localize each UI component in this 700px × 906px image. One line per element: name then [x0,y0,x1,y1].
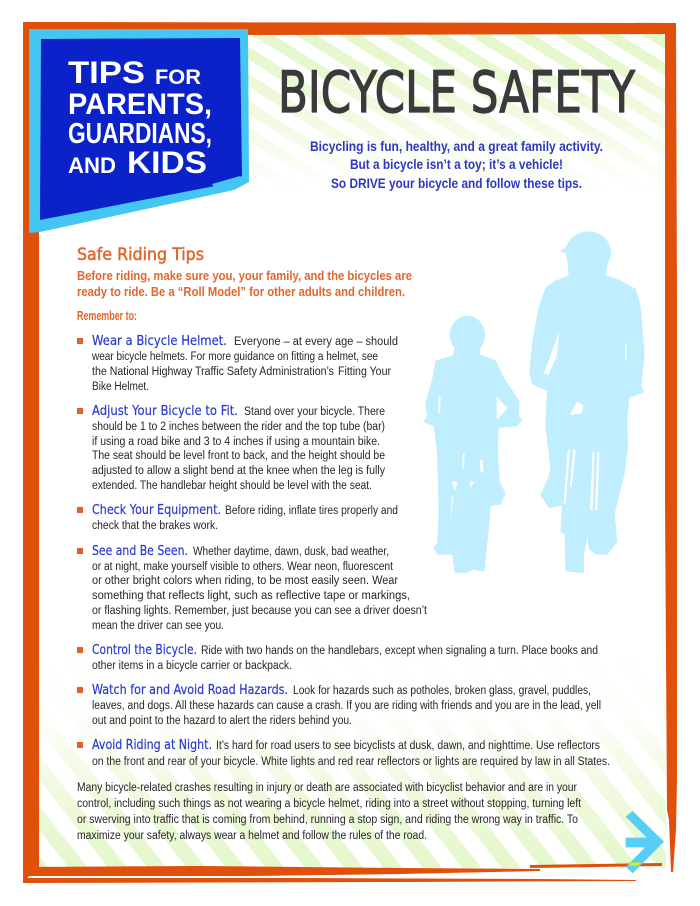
tip: wear a bicycle helmet [77,333,398,393]
tip: wear a bicycle helmet: Wear a Bicycle Helmet. [92,333,227,349]
tip: watch for road hazards: Look for hazards such as potholes, broken glass, gravel, puddles, [293,685,591,697]
tip: watch for road hazards: leaves, and dogs. All these hazards can cause a crash. If you are riding with friends and you are in the lead, yell [92,700,601,712]
intro text: Bicycling is fun, healthy, and a great family activity. [310,138,603,154]
lead-in text [77,269,412,323]
tip: see and be seen: Whether daytime, dawn, dusk, bad weather, [193,546,389,558]
tip: avoid riding at night: on the front and rear of your bicycle. White lights and red rear reflectors or lights are required by law in all States. [92,756,610,768]
icon: riders silhouette [425,231,643,572]
badge text: TIPS [68,54,145,90]
icon: next page arrow [626,811,664,873]
tip: wear a bicycle helmet: Fitting Your [338,366,391,378]
tip: avoid riding at night: It’s hard for road users to see bicyclists at dusk, dawn, and nighttime. Use reflectors [216,740,600,752]
child rider [425,316,521,572]
background stripes: bottom [39,725,666,868]
closing paragraph: control, including such things as not wearing a bicycle helmet, riding into a street without stopping, turning left [77,798,582,810]
lead-in text: ready to ride. Be a “Roll Model” for other adults and children. [77,285,405,299]
tip: control the bicycle: Ride with two hands on the handlebars, except when signaling a turn. Place books and [201,645,598,657]
tip: adjust your bicycle: Adjust Your Bicycle to Fit. [92,403,238,419]
lead-in text: Remember to: [77,309,137,323]
tip: adjust your bicycle: extended. The handlebar height should be level with the seat. [92,480,372,492]
tip: check your equipment [77,502,398,532]
tip: adjust your bicycle: if using a road bike and 3 to 4 inches if using a mountain bike. [92,436,380,448]
tip: watch for road hazards: Watch for and Avoid Road Hazards. [92,682,288,698]
badge text: AND [68,153,116,178]
tip: adjust your bicycle: should be 1 to 2 inches between the rider and the top tube (bar) [92,421,385,433]
badge text: FOR [155,65,201,89]
lead-in text: Before riding, make sure you, your family, and the bicycles are [77,269,412,283]
intro text [310,138,603,191]
tip: wear a bicycle helmet: Bike Helmet. [92,381,149,393]
closing paragraph: or swerving into traffic that is coming from behind, running a stop sign, and riding the wrong way in traffic. To [77,814,578,826]
tip: avoid riding at night [77,737,610,768]
closing paragraph: maximize your safety, always wear a helmet and follow the rules of the road. [77,830,427,842]
tip: wear a bicycle helmet: the National Highway Traffic Safety Administration’s [92,366,334,378]
tip: watch for road hazards [77,682,601,727]
tip: control the bicycle [77,642,598,672]
tip: wear a bicycle helmet: Everyone – at every age – should [234,336,398,348]
tip: see and be seen [77,543,428,632]
tip: check your equipment: Check Your Equipment. [92,502,221,518]
tip: adjust your bicycle: The seat should be level front to back, and the height should be [92,450,385,462]
tip: watch for road hazards: out and point to the hazard to alert the riders behind you. [92,715,352,727]
heading: safe riding tips: Safe Riding Tips [77,245,204,264]
tip: see and be seen: mean the driver can see you. [92,620,224,632]
adult rider [531,231,643,572]
tip: see and be seen: or at night, make yourself visible to others. Wear neon, fluorescent [92,561,394,573]
badge text: PARENTS, [68,88,212,121]
tip: see and be seen: See and Be Seen. [92,543,188,559]
tip: check your equipment: check that the brakes work. [92,520,218,532]
tip: see and be seen: or other bright colors when riding, to be most easily seen. Wear [92,575,398,587]
tip: wear a bicycle helmet: wear bicycle helmets. For more guidance on fitting a helmet, see [91,351,378,363]
tip: avoid riding at night: Avoid Riding at Night. [92,737,212,753]
intro text: So DRIVE your bicycle and follow these tips. [331,175,582,191]
background stripes: top [248,34,665,173]
badge text [68,54,212,180]
badge text: KIDS [127,144,207,180]
tip: adjust your bicycle: Stand over your bicycle. There [244,406,385,418]
panel: tips for parents badge [29,29,249,233]
tip: adjust your bicycle: adjusted to allow a slight bend at the knee when the leg is fully [92,465,385,477]
badge text: GUARDIANS, [68,118,212,150]
closing paragraph [77,782,582,842]
tip: see and be seen: or flashing lights. Remember, just because you can see a driver doesn’t [92,605,428,617]
tip: control the bicycle: other items in a bicycle carrier or backpack. [92,660,292,672]
tip: check your equipment: Before riding, inflate tires properly and [225,505,398,517]
closing paragraph: Many bicycle-related crashes resulting in injury or death are associated with bicyclist behavior and are in your [77,782,577,794]
intro text: But a bicycle isn’t a toy; it’s a vehicle! [350,156,563,172]
tip: control the bicycle: Control the Bicycle. [92,642,197,658]
tip: see and be seen: something that reflects light, such as reflective tape or markings, [92,590,410,602]
tip: adjust your bicycle [77,403,385,492]
